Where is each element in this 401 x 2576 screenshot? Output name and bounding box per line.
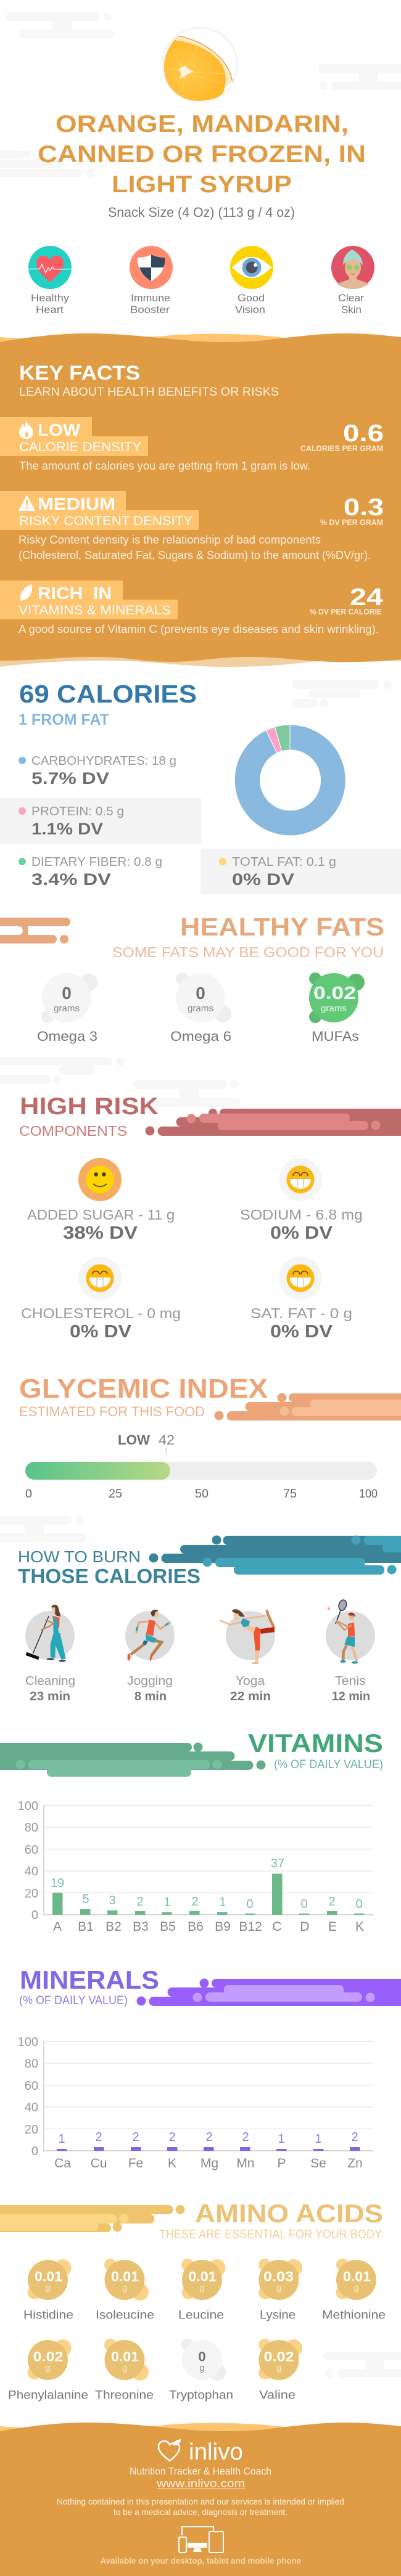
category labels: Ca	[54, 2156, 71, 2170]
icon: good vision	[230, 246, 273, 289]
activity: tennis: 12 min	[332, 1690, 370, 1703]
amino acid: tryptophan: Tryptophan	[169, 2389, 233, 2402]
section header: amino acids	[0, 2199, 383, 2241]
macro: carbohydrates: 5.7% DV	[31, 769, 109, 788]
component: cholesterol: 0% DV	[70, 1322, 132, 1342]
amino acid: valine	[258, 2339, 302, 2402]
value labels: 3	[109, 1894, 116, 1907]
category labels: D	[300, 1920, 310, 1934]
label: risky content density: RISKY CONTENT DENSITY	[19, 514, 192, 528]
unit: dv per gram: % DV PER GRAM	[320, 518, 383, 527]
fact: rich in vitamins and minerals	[0, 581, 383, 635]
macro: dietary fiber	[19, 855, 162, 889]
category labels: P	[277, 2156, 286, 2170]
title: CANNED OR FROZEN, IN	[38, 141, 366, 168]
label: good vision: Good	[238, 292, 265, 304]
label: immune booster: Immune	[131, 292, 170, 304]
decorative bars	[215, 1393, 401, 1420]
amino acid: methionine: g	[353, 2283, 359, 2293]
component: saturated fat	[250, 1257, 352, 1342]
value labels: 2	[136, 1895, 144, 1909]
y axis labels: 40	[25, 1865, 38, 1878]
value labels: 1	[58, 2132, 65, 2146]
macro: dietary fiber: 3.4% DV	[31, 870, 111, 889]
macro: protein: PROTEIN: 0.5 g	[31, 805, 124, 818]
fact: medium risky content density	[0, 491, 384, 561]
amino acid: histidine: g	[45, 2283, 51, 2293]
y axis labels: 20	[25, 1887, 38, 1901]
amino acid: valine: Valine	[259, 2389, 296, 2402]
food image: orange slice	[163, 28, 237, 102]
amino acid: methionine: 0.01	[343, 2269, 371, 2284]
description: medium	[19, 534, 371, 561]
heading: 69 calories: 69 CALORIES	[19, 680, 197, 708]
decorative bars	[0, 2205, 185, 2232]
title	[38, 111, 366, 198]
label: healthy heart: Heart	[36, 304, 64, 316]
amino acid: isoleucine: Isoleucine	[96, 2309, 154, 2322]
label: rich in: RICH IN	[38, 584, 112, 603]
disclaimer: to be a medical advice, diagnosis or treatment.	[114, 2507, 287, 2517]
category labels: K	[168, 2156, 176, 2170]
category labels: E	[328, 1920, 337, 1934]
icon: warning triangle	[19, 495, 35, 511]
label: low: LOW	[38, 420, 81, 439]
background cloud: top right	[318, 64, 401, 90]
icon: flame	[19, 420, 33, 439]
amino acid: leucine: Leucine	[178, 2309, 224, 2322]
amino acid: leucine: g	[199, 2283, 205, 2293]
decorative bars	[146, 1109, 401, 1136]
fat: omega 6: 0	[196, 984, 205, 1003]
value labels: 2	[351, 2130, 358, 2144]
section header: vitamins	[0, 1729, 383, 1777]
tagline: Nutrition Tracker & Health Coach	[130, 2465, 271, 2477]
value labels: 2	[205, 2130, 213, 2144]
macro: total fat	[219, 855, 336, 889]
panel: calories	[0, 680, 401, 894]
activity: yoga: Yoga	[236, 1674, 265, 1688]
amino acid: phenylalanine: 0.02	[33, 2349, 63, 2364]
category labels	[54, 2156, 363, 2170]
amino acid: histidine: 0.01	[35, 2269, 62, 2284]
y axis labels: 80	[25, 2057, 38, 2071]
amino acid: isoleucine: 0.01	[111, 2269, 139, 2284]
fat: omega 6: Omega 6	[170, 1029, 231, 1044]
marker label	[118, 1432, 175, 1448]
subheading: COMPONENTS	[19, 1123, 127, 1139]
value labels: 0	[355, 1897, 363, 1911]
logo	[159, 2439, 243, 2465]
heading: HEALTHY FATS	[180, 913, 384, 941]
bars	[57, 2147, 360, 2151]
amino acid: threonine	[95, 2339, 154, 2402]
category labels: C	[272, 1920, 282, 1934]
value labels: 5	[82, 1893, 89, 1906]
component: saturated fat: SAT. FAT - 0 g	[250, 1305, 352, 1321]
description: medium: Risky Content density is the relationship of bad components	[19, 534, 321, 546]
macro: protein: 1.1% DV	[31, 820, 103, 838]
subheading: (% OF DAILY VALUE)	[19, 1994, 128, 2007]
category labels: Fe	[128, 2156, 143, 2170]
category labels: Mn	[236, 2156, 255, 2170]
unit: dv per calorie: % DV PER CALORIE	[310, 607, 382, 616]
heading: HIGH RISK	[20, 1093, 159, 1120]
value: 24: 24	[350, 584, 383, 611]
icon: leaf	[20, 584, 32, 601]
section header: how to burn	[18, 1536, 401, 1588]
value labels: 2	[132, 2130, 139, 2144]
component: cholesterol	[21, 1257, 181, 1342]
y axis labels: 100	[18, 2036, 38, 2049]
component: sodium: SODIUM - 6.8 mg	[240, 1207, 363, 1223]
label: immune booster: Booster	[130, 304, 170, 316]
amino acid: threonine: Threonine	[95, 2389, 154, 2402]
category labels: B1	[78, 1920, 94, 1934]
macro: total fat: 0% DV	[232, 870, 294, 889]
amino acid: lysine: g	[276, 2283, 281, 2293]
amino acid: threonine: 0.01	[111, 2349, 139, 2364]
heading: MINERALS	[20, 1965, 159, 1994]
background cloud: calories	[292, 680, 392, 707]
background cloud: behind title	[0, 150, 95, 177]
subheading: 1 from fat: 1 FROM FAT	[19, 711, 109, 728]
fat: omega 6: grams	[188, 1003, 213, 1014]
value labels: 1	[278, 2132, 285, 2146]
decorative bars	[0, 918, 70, 944]
decorative bars	[137, 1978, 401, 2006]
label: good vision	[235, 292, 265, 316]
description: low: The amount of calories you are getting from 1 gram is low.	[19, 460, 310, 472]
fact: low calorie density	[0, 417, 384, 472]
amino acid: tryptophan	[169, 2339, 233, 2402]
category labels: B12	[239, 1920, 262, 1934]
fat: omega 3: grams	[54, 1003, 80, 1014]
section header: minerals	[19, 1965, 401, 2007]
value labels	[58, 2130, 358, 2146]
logo: inlivo	[189, 2439, 243, 2465]
label: immune booster	[130, 292, 170, 316]
y axis labels: 40	[25, 2101, 38, 2114]
availability note: Available on your desktop, tablet and mobile phone	[100, 2556, 301, 2566]
activity: jogging: 8 min	[134, 1690, 167, 1703]
y axis labels	[18, 1800, 38, 1922]
macro: dietary fiber: DIETARY FIBER: 0.8 g	[31, 855, 162, 869]
description: medium: (Cholesterol, Saturated Fat, Sugars & Sodium) to the amount (%DV/gr).	[19, 549, 371, 561]
disclaimer	[57, 2497, 344, 2517]
y axis labels: 100	[18, 1800, 38, 1813]
label: vitamins and minerals: VITAMINS & MINERALS	[19, 603, 171, 618]
y axis labels: 20	[25, 2123, 38, 2137]
label: good vision: Vision	[235, 304, 265, 316]
background cloud: amino acids	[323, 2352, 401, 2378]
activity: cleaning: Cleaning	[25, 1674, 75, 1688]
amino acid: methionine: Methionine	[322, 2309, 386, 2322]
activity: jogging	[125, 1610, 175, 1703]
amino acid: isoleucine	[96, 2259, 154, 2322]
chart: vitamins bar chart	[18, 1800, 373, 1934]
label: calorie density: CALORIE DENSITY	[19, 440, 141, 454]
category labels: B9	[215, 1920, 231, 1934]
value: 0.3: 0.3	[344, 494, 384, 521]
fat: mufas: 0.02	[313, 984, 356, 1003]
amino acid: lysine	[258, 2259, 302, 2322]
category labels: Se	[310, 2156, 326, 2170]
category labels: B5	[160, 1920, 176, 1934]
y axis labels	[18, 2036, 38, 2158]
macro: carbohydrates	[19, 754, 176, 788]
macro: total fat: TOTAL FAT: 0.1 g	[232, 855, 336, 869]
section header: high risk	[19, 1093, 401, 1139]
component: added sugar: ADDED SUGAR - 11 g	[27, 1207, 175, 1223]
heading: AMINO ACIDS	[195, 2199, 383, 2228]
amino acid: threonine: g	[122, 2363, 127, 2373]
highlight rows	[0, 798, 401, 894]
amino acid: tryptophan: g	[199, 2363, 205, 2373]
scale labels: 75	[283, 1488, 297, 1501]
panel: footer	[0, 2423, 401, 2576]
component: added sugar: 38% DV	[63, 1223, 138, 1243]
scale labels: 50	[195, 1488, 209, 1501]
amino acid: lysine: Lysine	[260, 2309, 296, 2322]
subheading: ESTIMATED FOR THIS FOOD	[19, 1404, 205, 1419]
donut chart	[234, 725, 345, 836]
heading: key facts: KEY FACTS	[19, 362, 140, 384]
component: sodium	[240, 1158, 363, 1243]
subheading: SOME FATS MAY BE GOOD FOR YOU	[112, 944, 384, 960]
y axis labels: 60	[25, 2079, 38, 2093]
amino acid: phenylalanine: g	[45, 2363, 51, 2373]
label: medium: MEDIUM	[38, 494, 115, 513]
value labels: 1	[315, 2132, 322, 2146]
chart: glycemic index gauge	[25, 1432, 378, 1501]
activity: yoga	[220, 1609, 275, 1703]
component: added sugar	[27, 1158, 175, 1243]
activity: jogging: Jogging	[127, 1674, 173, 1688]
background cloud: top left	[6, 12, 114, 38]
panel: key facts	[0, 333, 401, 667]
amino acid: lysine: 0.03	[263, 2269, 294, 2284]
scale labels: 25	[109, 1488, 122, 1501]
title: ORANGE, MANDARIN,	[56, 111, 349, 137]
component: cholesterol: CHOLESTEROL - 0 mg	[21, 1305, 181, 1321]
decorative bars	[149, 1536, 401, 1575]
subheading: THOSE CALORIES	[18, 1565, 200, 1588]
value labels: 2	[168, 2130, 176, 2144]
background cloud: high risk right	[133, 1080, 241, 1107]
subheading: (% OF DAILY VALUE)	[274, 1758, 383, 1771]
fat: omega 3	[37, 973, 97, 1044]
category labels: Zn	[347, 2156, 363, 2170]
y axis labels: 80	[25, 1821, 38, 1835]
macro: carbohydrates: CARBOHYDRATES: 18 g	[31, 754, 176, 768]
bars	[52, 1873, 364, 1915]
fat: mufas	[309, 972, 365, 1044]
y axis labels: 60	[25, 1843, 38, 1857]
value labels: 0	[246, 1897, 254, 1911]
section header: glycemic index	[19, 1374, 401, 1420]
label: clear skin: Clear	[338, 292, 364, 304]
marker label: 42	[159, 1432, 175, 1448]
value labels: 1	[219, 1896, 226, 1909]
heading: VITAMINS	[248, 1729, 383, 1758]
serving size subtitle: Snack Size (4 Oz) (113 g / 4 oz)	[108, 205, 295, 220]
category labels: Mg	[200, 2156, 218, 2170]
unit: calories per gram: CALORIES PER GRAM	[300, 444, 383, 453]
amino acid: methionine	[322, 2259, 386, 2322]
value labels: 19	[51, 1877, 64, 1890]
value labels: 37	[271, 1857, 284, 1870]
value labels: 2	[242, 2130, 249, 2144]
fat: mufas: MUFAs	[312, 1029, 359, 1044]
scale labels	[25, 1488, 378, 1501]
scale labels: 0	[25, 1488, 32, 1501]
amino acid: phenylalanine	[8, 2339, 88, 2402]
heading: HOW TO BURN	[18, 1547, 141, 1566]
amino acid: valine: 0.02	[264, 2349, 294, 2364]
category labels: B3	[133, 1920, 149, 1934]
amino acid: phenylalanine: Phenylalanine	[8, 2389, 88, 2402]
value labels	[51, 1857, 363, 1911]
activity: tennis	[326, 1599, 375, 1703]
amino acid: isoleucine: g	[122, 2283, 127, 2293]
icon: clear skin	[331, 246, 374, 289]
activity: cleaning	[25, 1605, 75, 1703]
website: www.inlivo.com	[156, 2477, 245, 2490]
value labels: 0	[300, 1897, 308, 1911]
category labels: A	[53, 1920, 62, 1934]
category labels: Cu	[91, 2156, 107, 2170]
marker label: LOW	[118, 1432, 150, 1448]
icon: immune booster	[130, 246, 173, 289]
fat: omega 6	[170, 972, 231, 1044]
activity: yoga: 22 min	[230, 1690, 271, 1703]
label: healthy heart: Healthy	[31, 292, 70, 304]
amino acid: valine: g	[276, 2363, 281, 2373]
value labels: 2	[328, 1895, 336, 1909]
label: clear skin: Skin	[341, 304, 362, 316]
decorative bars	[0, 1743, 265, 1777]
y axis labels: 0	[31, 2145, 38, 2158]
amino acid: histidine: Histidine	[23, 2309, 73, 2322]
description: rich: A good source of Vitamin C (prevents eye diseases and skin wrinkling).	[19, 623, 379, 635]
y axis labels: 0	[31, 1909, 38, 1922]
title: LIGHT SYRUP	[112, 171, 292, 198]
background cloud: high risk left	[0, 1057, 125, 1084]
category labels: B2	[105, 1920, 122, 1934]
background cloud: burn	[0, 1516, 86, 1542]
category labels: K	[355, 1920, 364, 1934]
amino acid: leucine	[178, 2259, 226, 2322]
value labels: 2	[191, 1895, 199, 1909]
scale labels: 100	[359, 1488, 378, 1501]
amino acid: leucine: 0.01	[189, 2269, 216, 2284]
component: sodium: 0% DV	[270, 1223, 333, 1243]
amino acid: tryptophan: 0	[198, 2349, 206, 2364]
icon: healthy heart	[28, 246, 72, 289]
activity: cleaning: 23 min	[30, 1690, 70, 1703]
value: 0.6: 0.6	[343, 420, 384, 447]
fat: omega 3: 0	[62, 984, 72, 1003]
disclaimer: Nothing contained in this presentation and our services is intended or implied	[57, 2497, 344, 2506]
subheading: THESE ARE ESSENTIAL FOR YOUR BODY	[159, 2228, 382, 2241]
amino acid: histidine	[23, 2259, 73, 2322]
fat: omega 3: Omega 3	[37, 1029, 97, 1044]
fat: mufas: grams	[321, 1003, 347, 1014]
component: saturated fat: 0% DV	[270, 1322, 333, 1342]
section header: healthy fats	[0, 913, 384, 960]
activity: tennis: Tenis	[335, 1674, 366, 1688]
label: healthy heart	[31, 292, 70, 316]
value labels: 2	[95, 2130, 102, 2144]
heading: GLYCEMIC INDEX	[19, 1374, 268, 1404]
category labels	[53, 1920, 364, 1934]
category labels: B6	[188, 1920, 204, 1934]
icon: devices	[179, 2527, 223, 2553]
subheading: key facts: LEARN ABOUT HEALTH BENEFITS OR RISKS	[19, 386, 279, 399]
macro: protein	[19, 805, 124, 838]
chart: minerals bar chart	[18, 2036, 373, 2170]
value labels: 1	[163, 1896, 171, 1909]
label: clear skin	[338, 292, 364, 316]
